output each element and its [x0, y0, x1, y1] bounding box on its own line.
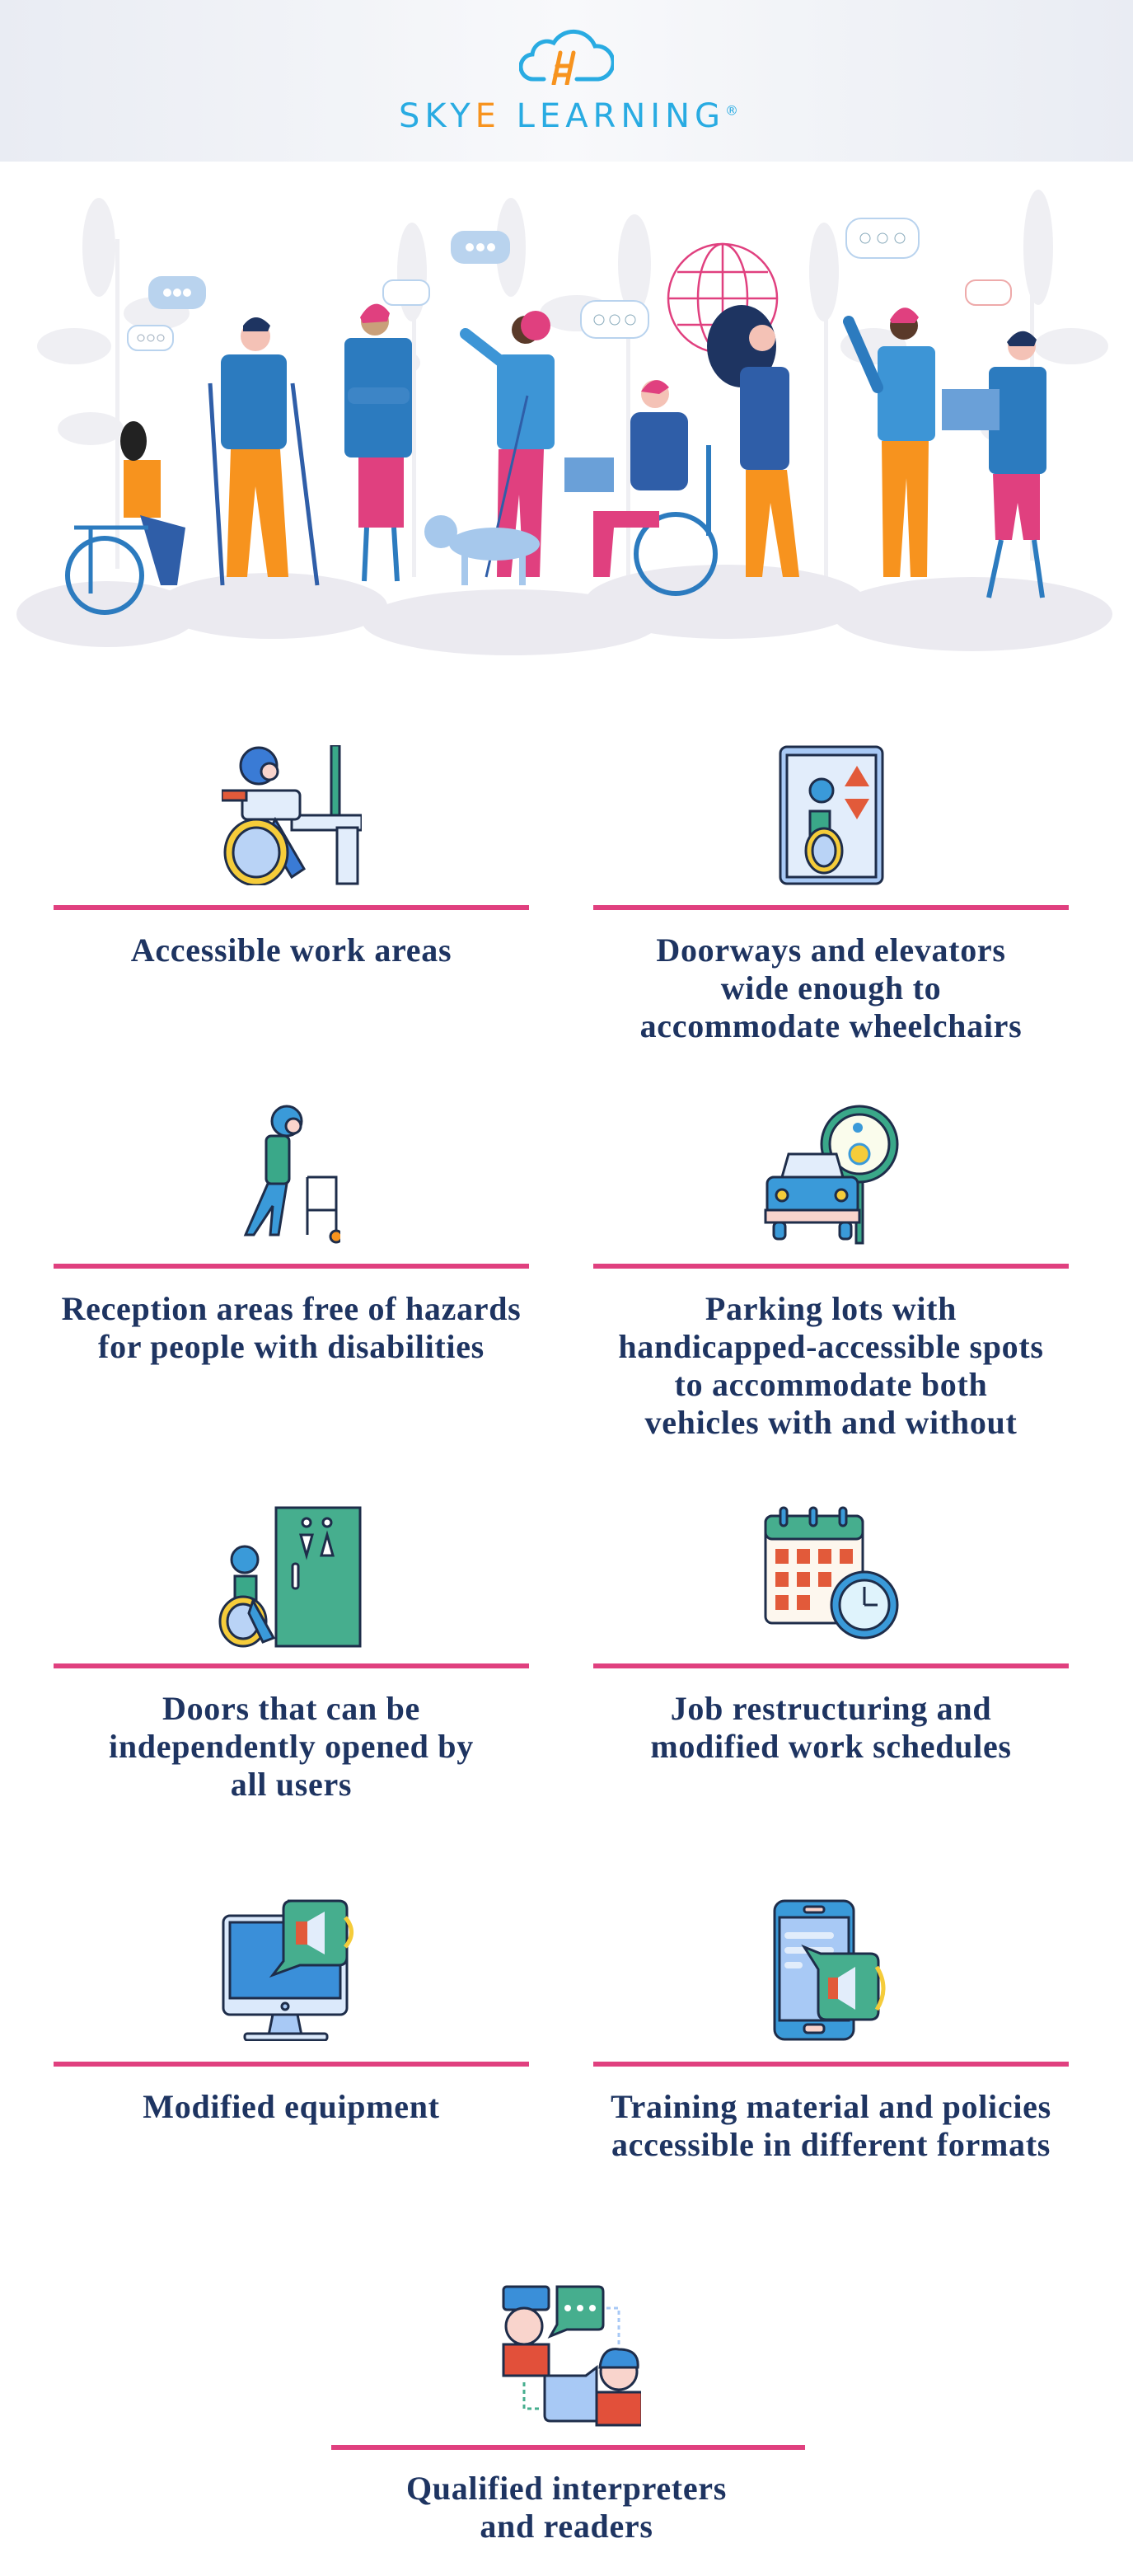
item 9: qualified interpreters	[331, 2285, 805, 2545]
label: accommodate wheelchairs	[640, 1007, 1022, 1044]
background plants	[37, 190, 1108, 577]
label: Modified equipment	[143, 2088, 440, 2125]
label: modified work schedules	[650, 1728, 1012, 1765]
label: wide enough to	[721, 969, 941, 1006]
label: Parking lots with	[705, 1290, 957, 1327]
icon: person at desk in wheelchair	[222, 745, 362, 885]
label	[406, 2470, 727, 2545]
label	[650, 1690, 1012, 1765]
item 8: training material	[593, 1899, 1069, 2163]
item 3: reception areas	[54, 1105, 529, 1365]
logo: cloud with ladder	[519, 30, 614, 85]
icon: monitor with speaker bubble	[222, 1899, 354, 2041]
label: Doors that can be	[162, 1690, 420, 1727]
person 8 with laptop and prosthetic legs	[942, 331, 1046, 598]
divider line	[54, 2062, 529, 2067]
divider line	[54, 905, 529, 910]
label	[618, 1290, 1044, 1441]
icon: calendar and alarm clock	[765, 1507, 898, 1639]
person 3 arms crossed	[344, 304, 412, 581]
header band	[0, 0, 1133, 162]
person 2 crutches	[210, 317, 317, 585]
label: Reception areas free of hazards	[62, 1290, 521, 1327]
label: all users	[231, 1766, 352, 1803]
icon: phone with speaker bubble	[773, 1899, 886, 2041]
divider line	[331, 2445, 805, 2450]
item 2: doorways and elevators	[593, 745, 1069, 1044]
label	[62, 1290, 521, 1365]
label: to accommodate both	[675, 1366, 987, 1403]
person 1 wheelchair woman	[68, 421, 185, 612]
person 7 man pointing	[849, 307, 935, 577]
dog	[424, 515, 540, 585]
label: Accessible work areas	[131, 931, 452, 969]
label: Qualified interpreters	[406, 2470, 727, 2507]
icon: person with walker	[244, 1105, 340, 1243]
speech bubbles	[128, 218, 1011, 350]
label: vehicles with and without	[644, 1404, 1017, 1441]
globe	[668, 244, 777, 353]
logo text: SKYE LEARNING®	[399, 97, 738, 135]
divider line	[593, 1264, 1069, 1269]
label: independently opened by	[109, 1728, 474, 1765]
label	[109, 1690, 474, 1803]
divider line	[54, 1264, 529, 1269]
person 4 blind woman with cane	[466, 311, 555, 577]
divider line	[54, 1663, 529, 1668]
ground shadows	[16, 565, 1112, 655]
divider line	[593, 905, 1069, 910]
label: Job restructuring and	[671, 1690, 991, 1727]
item 4: parking lots	[593, 1105, 1069, 1441]
divider line	[593, 2062, 1069, 2067]
label	[640, 931, 1022, 1044]
label: handicapped-accessible spots	[618, 1328, 1044, 1365]
label: Training material and policies	[611, 2088, 1051, 2125]
icon: restroom door with wheelchair user	[219, 1507, 361, 1647]
item 1: accessible work areas	[54, 745, 529, 969]
divider line	[593, 1663, 1069, 1668]
icon: two people with speech and sign language	[503, 2285, 641, 2427]
label: accessible in different formats	[611, 2126, 1051, 2163]
hero illustration: diverse people	[16, 190, 1112, 655]
icon: car and accessible parking sign	[765, 1105, 898, 1245]
label	[611, 2088, 1051, 2163]
item 6: job restructuring	[593, 1507, 1069, 1765]
label: Doorways and elevators	[656, 931, 1006, 969]
item 7: modified equipment	[54, 1899, 529, 2125]
item 5: doors opened by all users	[54, 1507, 529, 1803]
label: and readers	[480, 2508, 653, 2545]
label: for people with disabilities	[98, 1328, 485, 1365]
person 5 wheelchair man with laptop	[564, 380, 715, 594]
icon: elevator	[780, 745, 883, 885]
person 6 woman long hair	[707, 305, 799, 577]
